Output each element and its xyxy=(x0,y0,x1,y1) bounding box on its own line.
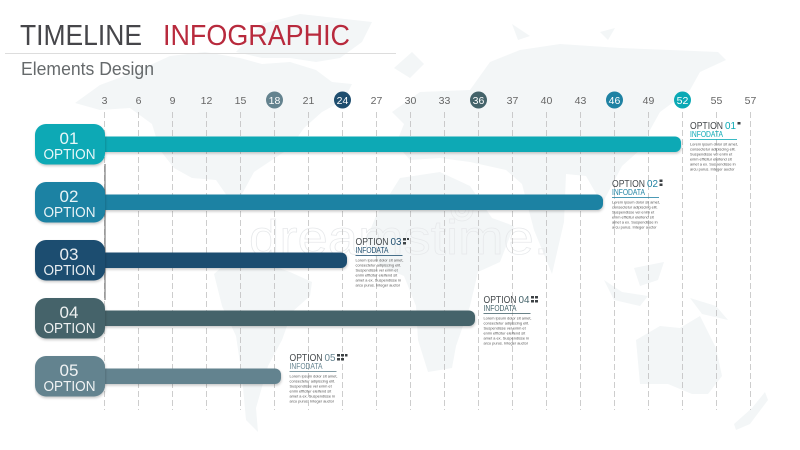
timeline axis numbers: 15 xyxy=(235,95,246,107)
info block: option 05: OPTION xyxy=(290,352,322,364)
info block: option 01 xyxy=(690,120,740,172)
timeline axis numbers: 57 xyxy=(745,95,756,107)
info block: option 04: amet a ex. Suspendisse in xyxy=(484,336,529,340)
info block: option 05: 05 xyxy=(324,352,336,364)
info block: option 01: arcu purus. Integer auctor xyxy=(690,166,735,172)
row 02 bar and option pill: 02 xyxy=(60,187,78,206)
row 01 bar and option pill: 01 xyxy=(60,129,78,148)
title: INFOGRAPHIC xyxy=(163,20,350,52)
info block: option 03: arcu purus. Integer auctor xyxy=(356,282,401,288)
row 03 bar and option pill: OPTION xyxy=(44,263,96,279)
info block: option 05: amet a ex. Suspendisse in xyxy=(290,394,335,398)
timeline axis numbers: 55 xyxy=(711,95,722,107)
info block: option 01: Lorem ipsum dolor sit amet, xyxy=(690,142,738,146)
info block: option 04: Lorem ipsum dolor sit amet, xyxy=(484,316,532,320)
info block: option 02: Suspendisse vel enim et xyxy=(612,210,655,214)
info block: option 04: enim efficitur eleifend sit xyxy=(484,330,526,336)
row 05 bar and option pill: 05 xyxy=(60,361,78,380)
info block: option 01: enim efficitur eleifend sit xyxy=(690,156,733,162)
info block: option 01: INFODATA xyxy=(690,130,724,139)
info block: option 03: Lorem ipsum dolor sit amet, xyxy=(356,258,404,262)
info block: option 05: consectetur adipiscing elit. xyxy=(290,378,335,384)
row 05 bar and option pill xyxy=(35,356,281,396)
info block: option 04: consectetur adipiscing elit. xyxy=(484,320,529,326)
timeline axis numbers xyxy=(102,92,756,108)
info block: option 02: enim efficitur eleifend sit xyxy=(612,214,655,220)
timeline axis numbers: 30 xyxy=(405,95,416,107)
info block: option 04: INFODATA xyxy=(484,304,517,313)
row 02 bar and option pill xyxy=(35,182,603,222)
timeline axis numbers: 40 xyxy=(541,95,552,107)
info block: option 01: 01 xyxy=(725,120,736,132)
info block: option 02: INFODATA xyxy=(612,188,646,197)
info block: option 02: 02 xyxy=(647,178,658,190)
info block: option 03: Suspendisse vel enim et xyxy=(356,268,399,272)
timeline axis numbers: 43 xyxy=(575,95,586,107)
info block: option 05: Lorem ipsum dolor sit amet, xyxy=(290,374,338,378)
row 01 bar and option pill: OPTION xyxy=(44,147,96,163)
info block: option 05: INFODATA xyxy=(290,362,323,371)
timeline axis numbers: 49 xyxy=(643,95,654,107)
info block: option 05: arcu purus. Integer auctor xyxy=(290,398,335,404)
info block: option 01: Suspendisse vel enim et xyxy=(690,152,733,156)
info block: option 04 xyxy=(484,294,538,346)
timeline axis numbers: 52 xyxy=(677,95,688,107)
info block: option 03: INFODATA xyxy=(356,246,389,255)
info block: option 03: consectetur adipiscing elit. xyxy=(356,262,401,268)
row 04 bar and option pill: OPTION xyxy=(44,321,96,337)
info block: option 03: OPTION xyxy=(356,236,388,248)
timeline axis numbers: 6 xyxy=(136,95,142,107)
timeline axis numbers: 3 xyxy=(102,95,108,107)
timeline axis numbers: 36 xyxy=(473,95,484,107)
row 02 bar and option pill: OPTION xyxy=(44,205,96,221)
row 03 bar and option pill xyxy=(35,240,347,280)
info block: option 01: OPTION xyxy=(690,120,723,132)
info block: option 04: OPTION xyxy=(484,294,516,306)
row 04 bar and option pill xyxy=(35,298,475,338)
info block: option 02: OPTION xyxy=(612,178,645,190)
info block: option 01: consectetur adipiscing elit. xyxy=(690,146,736,152)
timeline axis numbers: 33 xyxy=(439,95,450,107)
info block: option 03: amet a ex. Suspendisse in xyxy=(356,278,401,282)
title xyxy=(20,20,350,52)
info block: option 05: Suspendisse vel enim et xyxy=(290,384,333,388)
info block: option 03: 03 xyxy=(390,236,402,248)
timeline axis numbers: 46 xyxy=(609,95,620,107)
info block: option 04: Suspendisse vel enim et xyxy=(484,326,527,330)
subtitle: Elements Design xyxy=(21,59,154,79)
row 03 bar and option pill: 03 xyxy=(60,245,78,264)
timeline axis numbers: 21 xyxy=(303,95,314,107)
title: TIMELINE xyxy=(20,20,142,52)
row 04 bar and option pill: 04 xyxy=(60,303,78,322)
timeline axis numbers: 18 xyxy=(269,95,280,107)
info block: option 03: enim efficitur eleifend sit xyxy=(356,272,398,278)
info block: option 02: arcu purus. Integer auctor xyxy=(612,224,657,230)
info block: option 03 xyxy=(356,236,409,288)
info block: option 05 xyxy=(290,352,348,404)
info block: option 01: amet a ex. Suspendisse in xyxy=(690,162,736,166)
info block: option 04: 04 xyxy=(518,294,530,306)
info block: option 02: amet a ex. Suspendisse in xyxy=(612,220,658,224)
info block: option 02: Lorem ipsum dolor sit amet, xyxy=(612,200,660,204)
info block: option 05: enim efficitur eleifend sit xyxy=(290,388,332,394)
row 05 bar and option pill: OPTION xyxy=(44,379,96,395)
info block: option 04: arcu purus. Integer auctor xyxy=(484,340,529,346)
info block: option 02: consectetur adipiscing elit. xyxy=(612,204,658,210)
row 01 bar and option pill xyxy=(35,124,681,164)
timeline axis numbers: 24 xyxy=(337,95,348,107)
timeline axis numbers: 27 xyxy=(371,95,382,107)
info block: option 02 xyxy=(612,178,662,230)
timeline axis numbers: 9 xyxy=(170,95,176,107)
watermark: dreamstime. xyxy=(249,212,549,265)
timeline axis numbers: 37 xyxy=(507,95,518,107)
timeline axis numbers: 12 xyxy=(201,95,212,107)
